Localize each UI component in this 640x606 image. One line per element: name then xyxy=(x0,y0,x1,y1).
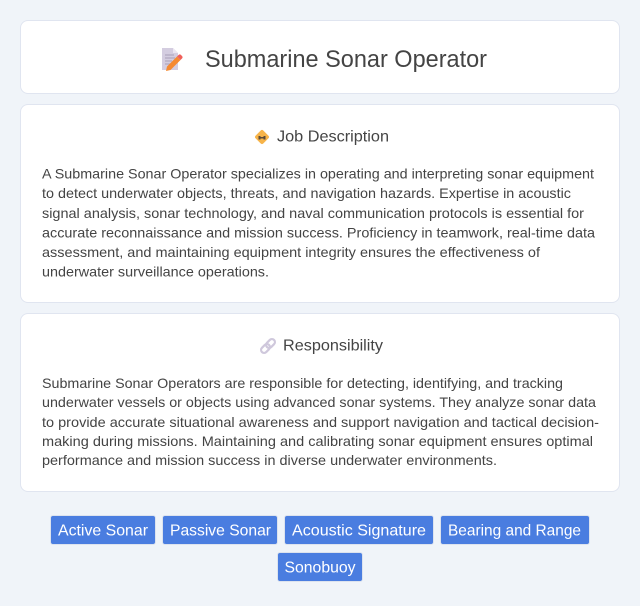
icon: diamond badge xyxy=(255,130,269,144)
text block: job description: to detect underwater objects, threats, and navigation hazards. Expertise in acoustic xyxy=(42,185,571,201)
panel: responsibility xyxy=(20,313,620,492)
text block: job description: signal analysis, sonar technology, and naval communication protocols is essential for xyxy=(42,205,584,221)
text block: job description xyxy=(42,166,595,280)
text block: job description: assessment, and maintaining equipment integrity ensures the effectiveness of xyxy=(42,244,540,260)
tag: Sonobuoy: Sonobuoy xyxy=(284,560,356,576)
text block: job description: underwater surveillance operations. xyxy=(42,264,269,280)
text block: responsibility xyxy=(42,375,599,468)
title: Submarine Sonar Operator xyxy=(205,46,487,73)
icon: document with pencil xyxy=(162,48,183,71)
heading: job description: Job Description xyxy=(277,128,389,146)
tag: Bearing and Range xyxy=(440,515,590,545)
text block: responsibility: to provide accurate situational awareness and support navigation and tactical decision- xyxy=(42,414,599,430)
text block: responsibility: making during missions. Maintaining and calibrating sonar equipment ensures optimal xyxy=(42,433,593,449)
tag: Active Sonar: Active Sonar xyxy=(58,522,149,540)
tag: Acoustic Signature: Acoustic Signature xyxy=(292,522,426,540)
text block: responsibility: Submarine Sonar Operators are responsible for detecting, identifying, and tracking xyxy=(42,375,563,391)
tag: Acoustic Signature xyxy=(284,515,434,545)
tag: Active Sonar xyxy=(50,515,156,545)
icon: chain link xyxy=(260,338,276,354)
tag: Bearing and Range: Bearing and Range xyxy=(448,522,581,540)
tag: Passive Sonar: Passive Sonar xyxy=(170,522,272,540)
heading: responsibility: Responsibility xyxy=(283,338,383,354)
tag: Passive Sonar xyxy=(162,515,278,545)
panel: title card xyxy=(20,20,620,94)
text block: responsibility: underwater vessels or objects using advanced sonar systems. They analyze sonar data xyxy=(42,394,596,410)
tag: Sonobuoy xyxy=(277,552,363,582)
text block: job description: accurate reconnaissance and mission success. Proficiency in teamwork, real-time data xyxy=(42,224,595,240)
text block: responsibility: performance and mission success in diverse underwater environments. xyxy=(42,452,497,468)
panel: job description xyxy=(20,104,620,303)
text block: job description: A Submarine Sonar Operator specializes in operating and interpreting sonar equipment xyxy=(42,166,594,182)
